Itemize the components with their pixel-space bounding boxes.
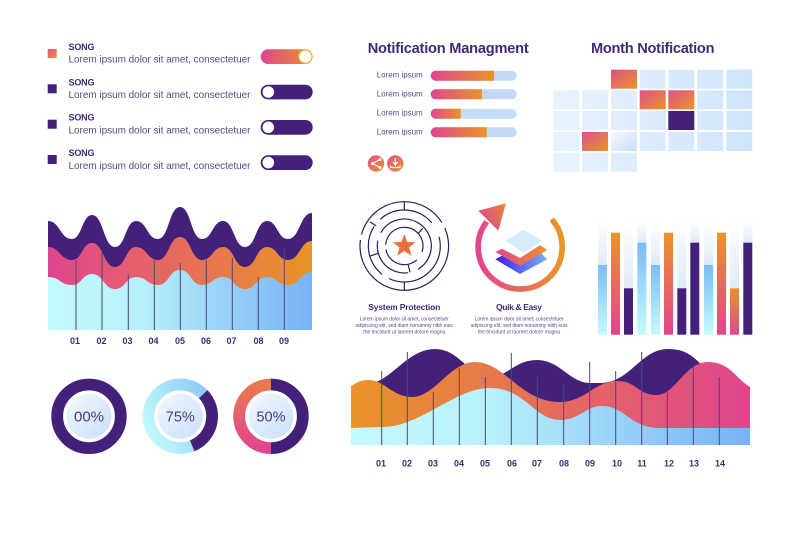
- vertical bar chart: [598, 222, 752, 335]
- caption: Quik & Easy: Lorem ipsum dolor sit amet, consectetuer: [474, 316, 564, 322]
- heading: Month Notification: Month Notification: [591, 41, 715, 57]
- caption: Quik & Easy: adipiscing elit, sed diam nonummy nibh euis: [470, 323, 568, 329]
- top chart axis labels: [70, 336, 289, 346]
- caption: System Protection: adipiscing elit, sed diam nonummy nibh euis: [356, 323, 453, 329]
- bottom chart axis labels: 01: [376, 458, 386, 468]
- caption: Quik & Easy: [470, 302, 568, 335]
- bottom chart axis labels: 14: [715, 458, 725, 468]
- donut: 75%: 75%: [166, 410, 195, 426]
- top chart axis labels: 05: [175, 336, 185, 346]
- legend row 2: SONG: [68, 78, 94, 88]
- top chart axis labels: 06: [201, 336, 211, 346]
- bottom chart axis labels: [376, 458, 725, 468]
- wave area chart (bottom right): [351, 349, 750, 445]
- donut: 75%: [149, 384, 212, 448]
- bottom chart axis labels: 07: [532, 458, 542, 468]
- legend row 3: SONG: [68, 112, 94, 122]
- wave area chart (top left): [48, 207, 312, 330]
- bar row 1: Lorem ipsum: [377, 71, 423, 80]
- legend row 2: Lorem ipsum dolor sit amet, consectetuer: [68, 90, 251, 101]
- legend row 1: [48, 42, 313, 66]
- legend row 3: Lorem ipsum dolor sit amet, consectetuer: [68, 126, 251, 136]
- top chart axis labels: 03: [122, 336, 133, 346]
- purple wave layer: [48, 207, 312, 300]
- purple wave layer: [376, 349, 710, 420]
- bottom chart axis labels: 06: [507, 458, 517, 468]
- caption: System Protection: System Protection: [368, 302, 440, 312]
- caption: System Protection: [356, 302, 453, 335]
- caption: Quik & Easy: the tincidunt ut laoreet dolore magna: [478, 329, 560, 335]
- light blue wave layer: [351, 388, 750, 445]
- caption: Quik & Easy: Quik & Easy: [496, 302, 542, 312]
- icon: share: [368, 155, 384, 172]
- legend row 1: Lorem ipsum dolor sit amet, consectetuer: [68, 54, 251, 66]
- bottom chart axis labels: 09: [585, 458, 595, 468]
- heading: Notification Managment: Notification Managment: [368, 41, 529, 57]
- bar row 3: Lorem ipsum: [377, 108, 423, 118]
- icon: download: [387, 155, 403, 172]
- top chart axis labels: 04: [148, 336, 159, 346]
- legend row 4: SONG: [68, 148, 94, 158]
- donut: 00%: [57, 384, 121, 448]
- legend list with toggles: [48, 42, 313, 172]
- bottom chart axis labels: 05: [480, 458, 490, 468]
- donut: 50%: [239, 384, 303, 448]
- bottom chart axis labels: 10: [612, 458, 622, 468]
- bottom chart axis labels: 08: [559, 458, 569, 468]
- bottom chart axis labels: 12: [664, 458, 674, 468]
- pink-orange wave layer: [48, 237, 312, 310]
- donut: 00%: 00%: [74, 408, 104, 426]
- month notification heatmap: [553, 70, 752, 172]
- legend row 4: [48, 148, 313, 172]
- bottom chart axis labels: 04: [454, 458, 464, 468]
- bottom chart axis labels: 11: [637, 458, 647, 468]
- top chart axis labels: 08: [253, 336, 264, 346]
- vertical markers: [76, 248, 284, 330]
- bottom chart axis labels: 03: [428, 458, 438, 468]
- notification progress bars: [377, 71, 517, 137]
- icon: maze with star: [360, 202, 449, 290]
- legend row 4: Lorem ipsum dolor sit amet, consectetuer: [68, 161, 251, 172]
- legend row 3: [48, 112, 313, 136]
- orange-pink wave layer: [351, 362, 750, 435]
- legend row 2: [48, 78, 313, 101]
- icon: circular arrow with layers: [478, 203, 562, 289]
- top chart axis labels: 02: [96, 336, 107, 346]
- donut: 50%: 50%: [256, 410, 286, 426]
- legend row 1: SONG: [68, 42, 94, 52]
- top chart axis labels: 09: [279, 336, 289, 346]
- bar row 4: Lorem ipsum: [377, 128, 423, 136]
- caption: System Protection: the tincidunt ut laoreet dolore magna: [363, 329, 446, 335]
- bottom chart axis labels: 13: [689, 458, 699, 468]
- bar row 2: Lorem ipsum: [377, 90, 423, 98]
- top chart axis labels: 07: [226, 336, 237, 346]
- bottom chart axis labels: 02: [402, 458, 412, 468]
- caption: System Protection: Lorem ipsum dolor sit amet, consectetuer: [360, 316, 449, 322]
- top chart axis labels: 01: [70, 336, 80, 346]
- light blue wave layer: [48, 270, 312, 330]
- vertical markers: [382, 352, 719, 445]
